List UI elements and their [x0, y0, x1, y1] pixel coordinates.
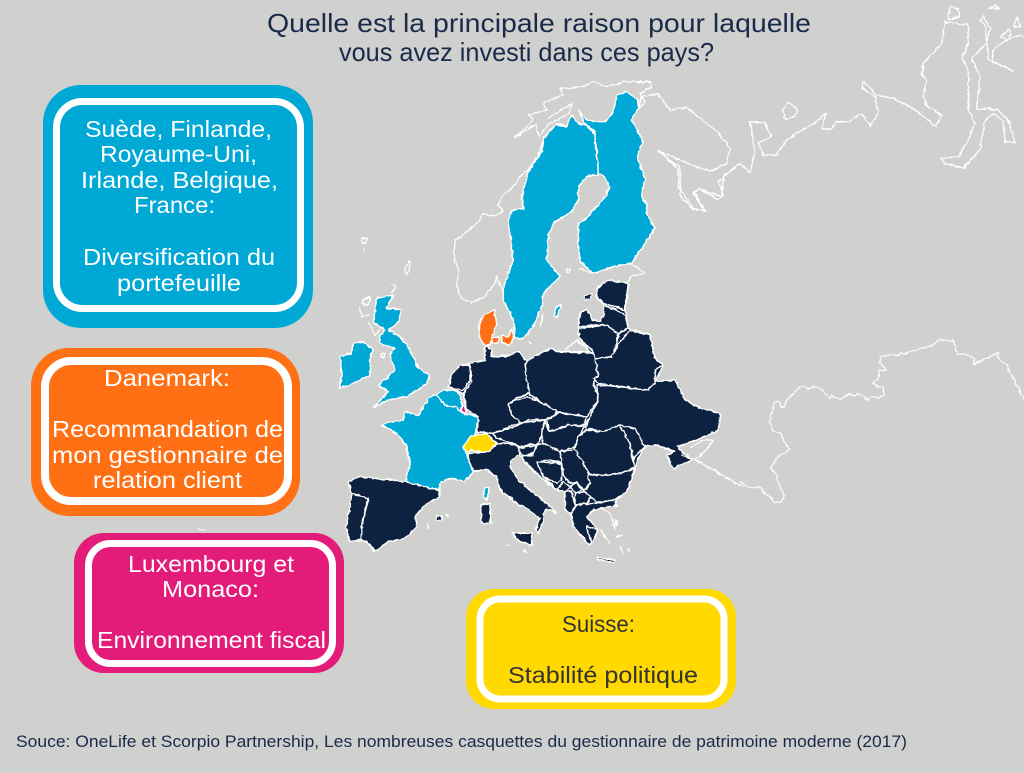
- Montenegro: [557, 482, 570, 492]
- Sardinia: [481, 503, 491, 523]
- Poland: [525, 348, 598, 417]
- Sicily: [512, 533, 532, 545]
- Estonia: [597, 280, 628, 310]
- Greece: [572, 500, 617, 545]
- Bulgaria: [583, 468, 635, 502]
- map of Europe: [198, 5, 1024, 563]
- Croatia: [522, 443, 563, 490]
- small Baltic and Atlantic islets: [362, 237, 590, 327]
- Switzerland: [463, 433, 497, 452]
- Belarus: [593, 331, 663, 390]
- Russia outline: southern border: [740, 339, 1023, 503]
- panel: Recommandation: [31, 348, 300, 516]
- panel: Recommandation: mon gestionnaire de: [52, 442, 283, 468]
- panel: Environnement fiscal: Luxembourg et: [128, 551, 295, 577]
- panel: Stabilité politique: Suisse:: [562, 611, 635, 637]
- panel: Recommandation: Recommandation de: [52, 416, 283, 442]
- Baltic coast of Russia: [593, 263, 645, 282]
- Denmark: [479, 309, 514, 346]
- panel: Diversification: France:: [134, 192, 215, 218]
- Portugal: [346, 493, 368, 542]
- title: [267, 8, 811, 67]
- Corsica: [483, 488, 489, 500]
- panel: Environnement fiscal: [74, 533, 344, 673]
- Great Britain: [373, 295, 430, 407]
- source note: Souce: OneLife et Scorpio Partnership, Les nombreuses casquettes du gestionnaire de patrimoine moderne (2017): [16, 732, 907, 751]
- Arctic islands: [783, 5, 1021, 119]
- panel: Diversification: Diversification du: [83, 244, 275, 270]
- panel: Diversification: Irlande, Belgique,: [81, 167, 278, 193]
- panel: Diversification: portefeuille: [117, 270, 241, 296]
- Latvia: [578, 305, 628, 333]
- Bosnia: [537, 462, 562, 483]
- Estonian islands: [584, 293, 592, 300]
- Kaliningrad and Azov coast: [565, 340, 743, 487]
- Northern Norway coast: [515, 82, 740, 212]
- title: Quelle est la principale raison pour laquelle: [267, 8, 811, 38]
- Ukraine: [587, 380, 720, 468]
- Belgium: [437, 389, 462, 412]
- Spain: [348, 477, 440, 552]
- Slovenia: [518, 445, 538, 457]
- Germany: [463, 347, 530, 433]
- Slovakia: [547, 413, 587, 432]
- France: [382, 395, 478, 490]
- continental landmass: [448, 280, 720, 545]
- panel: Diversification: Royaume-Uni,: [100, 141, 257, 167]
- Lithuania: [578, 325, 618, 358]
- panel: Stabilité politique: [466, 589, 736, 709]
- Finland: [578, 92, 655, 273]
- Norway inner fjords: [515, 103, 572, 137]
- Norway outline: [454, 115, 572, 303]
- Crete: [597, 557, 615, 563]
- panel: Diversification: Suède, Finlande,: [85, 116, 272, 142]
- Gotland: [554, 304, 562, 317]
- Ireland: [340, 342, 373, 388]
- Kosovo: [570, 482, 582, 493]
- Scottish isles: [360, 284, 397, 357]
- Netherlands: [448, 365, 470, 390]
- panel: Diversification: [43, 85, 313, 328]
- Canary islets: [198, 528, 205, 530]
- Czechia: [508, 397, 558, 423]
- panel: Stabilité politique: Stabilité politique: [508, 662, 698, 688]
- Albania: [565, 491, 575, 515]
- Sweden: [503, 115, 598, 338]
- Aegean and Mediterranean islets: [427, 342, 630, 553]
- North Macedonia: [575, 492, 591, 505]
- Luxembourg: [462, 406, 466, 413]
- Russia outline: Arctic coast: [658, 17, 1024, 211]
- panel: Environnement fiscal: Environnement fiscal: [97, 627, 326, 653]
- Austria: [493, 420, 545, 447]
- Romania: [575, 425, 635, 475]
- Moldova: [620, 425, 645, 458]
- title: vous avez investi dans ces pays?: [339, 37, 714, 67]
- Italy: [468, 443, 556, 533]
- panel: Recommandation: relation client: [93, 467, 243, 493]
- Hungary: [542, 422, 585, 452]
- panel: Environnement fiscal: Monaco:: [162, 576, 259, 602]
- Serbia: [560, 450, 590, 490]
- panel: Recommandation: Danemark:: [104, 365, 230, 391]
